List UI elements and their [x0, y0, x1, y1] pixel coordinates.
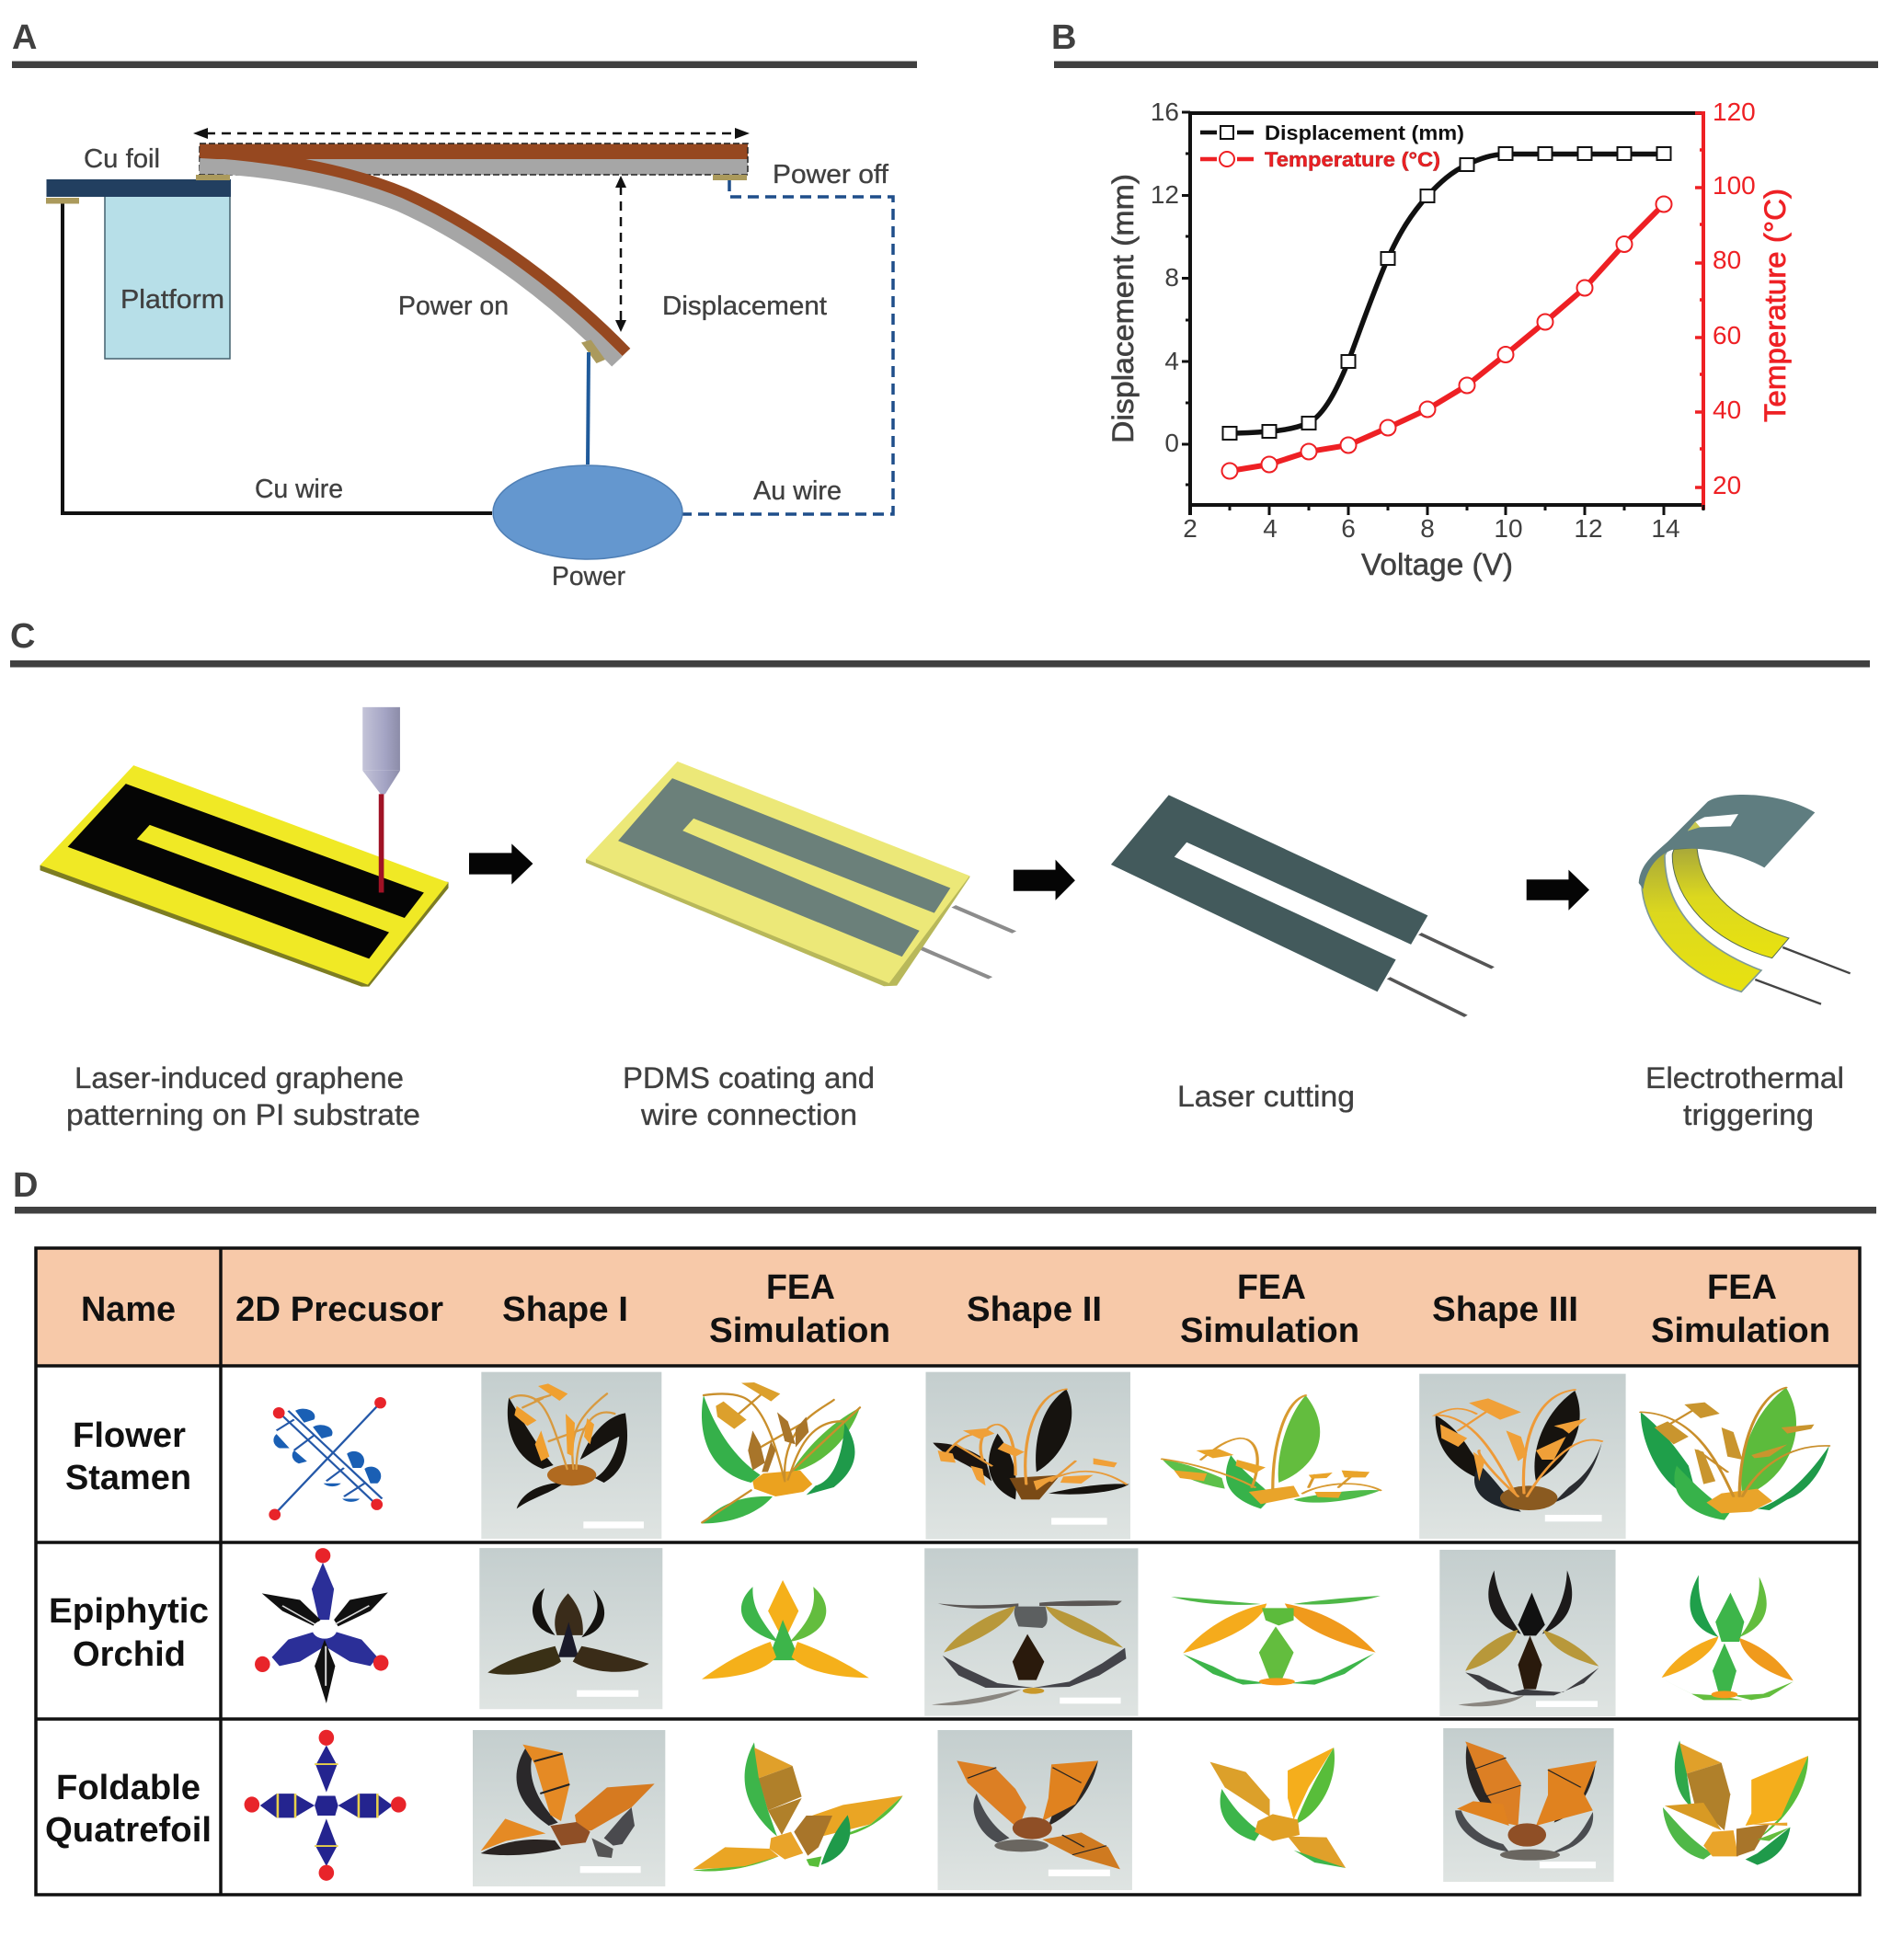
labels: Power on — [398, 292, 509, 321]
bottom axis numbers: 4 — [1263, 514, 1278, 543]
photo: orchid shape III — [1439, 1550, 1616, 1716]
bottom axis numbers: 12 — [1574, 514, 1603, 543]
legend — [1200, 121, 1464, 171]
labels: Power — [552, 562, 625, 591]
step 2 coated substrate — [586, 762, 1014, 986]
FEA: stamen III — [1641, 1388, 1829, 1520]
photo: quatrefoil shape II — [938, 1730, 1132, 1890]
column headers: Shape II — [967, 1290, 1102, 1329]
FEA: stamen I — [702, 1382, 860, 1523]
labels: Cu wire — [255, 475, 343, 504]
FEA: stamen II — [1162, 1395, 1381, 1508]
column headers: Shape I — [502, 1290, 628, 1329]
left axis numbers: 16 — [1151, 97, 1179, 126]
right axis numbers: 60 — [1713, 321, 1741, 350]
bottom axis numbers: 14 — [1651, 514, 1680, 543]
legend: Displacement (mm) — [1265, 121, 1464, 144]
right axis numbers: 80 — [1713, 246, 1741, 274]
right axis numbers: 20 — [1713, 471, 1741, 499]
photo: quatrefoil shape I — [473, 1730, 665, 1886]
column headers: FEA — [1707, 1268, 1777, 1307]
labels: Platform — [120, 285, 224, 315]
temperature curve — [1230, 204, 1664, 471]
column headers: FEA — [766, 1268, 835, 1307]
left axis numbers: 12 — [1151, 180, 1179, 209]
plot frame — [1190, 111, 1703, 515]
step 1 and 2 artwork — [40, 707, 1014, 987]
laser nozzle — [362, 707, 400, 892]
row labels: Stamen — [65, 1459, 191, 1497]
arrow 2 — [1014, 860, 1075, 900]
step captions: PDMS coating and — [623, 1061, 875, 1095]
column headers — [81, 1268, 1830, 1350]
precursor: flower stamen — [269, 1397, 386, 1520]
step 1 yellow substrate — [40, 765, 449, 987]
2D precursors and orchid shape I cells — [245, 1397, 869, 1881]
FEA: quatrefoil II — [1209, 1748, 1346, 1868]
axis titles — [1106, 174, 1792, 581]
column headers: Simulation — [1651, 1312, 1830, 1350]
displacement arrow — [615, 176, 626, 332]
Au wire dashed path — [682, 180, 893, 514]
labels: Au wire — [753, 476, 842, 506]
heading A: A — [12, 18, 37, 57]
step captions: Laser cutting — [1177, 1080, 1355, 1113]
step 3 artwork — [1014, 795, 1589, 1016]
length arrow — [193, 128, 750, 139]
contact pads — [46, 175, 747, 204]
straight beam power off — [200, 143, 748, 175]
column headers: 2D Precusor — [235, 1290, 443, 1329]
heading D: D — [13, 1166, 38, 1205]
left axis numbers: 4 — [1164, 347, 1179, 375]
row labels: Orchid — [73, 1635, 186, 1674]
step captions: Laser-induced graphene — [74, 1061, 404, 1095]
row labels: Epiphytic — [49, 1592, 209, 1631]
precursor: orchid — [255, 1548, 388, 1703]
blue wire to power — [588, 352, 589, 464]
step 4 bent actuator — [1639, 795, 1851, 1004]
row 2 shape II, III cells — [924, 1548, 1794, 1716]
row labels: Foldable — [56, 1769, 201, 1807]
Cu wire path — [63, 203, 492, 513]
row labels: Quatrefoil — [45, 1811, 212, 1850]
platform block — [105, 196, 230, 359]
row 3 shape I and FEA cells — [473, 1730, 903, 1886]
labels: Displacement — [662, 292, 827, 321]
bottom axis numbers: 6 — [1341, 514, 1356, 543]
right axis numbers: 40 — [1713, 395, 1741, 424]
panel A: actuator schematic — [12, 18, 917, 591]
table grid — [36, 1248, 1860, 1895]
power source ellipse — [493, 465, 682, 559]
row 1 shape II, III cells — [926, 1372, 1829, 1540]
bottom axis numbers: 8 — [1420, 514, 1435, 543]
column headers: Simulation — [709, 1312, 890, 1350]
left axis numbers: 8 — [1164, 263, 1179, 292]
left axis numbers — [1151, 97, 1179, 457]
photo: orchid shape II — [924, 1548, 1138, 1716]
FEA: orchid I — [702, 1580, 869, 1679]
step captions: patterning on PI substrate — [66, 1098, 420, 1131]
column headers: FEA — [1237, 1268, 1306, 1307]
step captions: Electrothermal — [1645, 1061, 1844, 1095]
FEA: orchid II — [1171, 1596, 1381, 1685]
legend: Temperature (°C) — [1265, 148, 1440, 171]
left and bottom ticks — [1182, 112, 1703, 515]
right ticks — [1695, 113, 1703, 487]
row 1 shape I and FEA cells — [481, 1372, 860, 1539]
step captions — [66, 1061, 1844, 1131]
bottom axis numbers — [1183, 514, 1680, 543]
photo: stamen shape I — [481, 1372, 661, 1539]
bent beam power on — [200, 152, 626, 363]
step captions: triggering — [1683, 1098, 1814, 1131]
FEA: quatrefoil III — [1663, 1740, 1808, 1865]
photo: stamen shape III — [1419, 1374, 1626, 1539]
displacement markers — [1223, 147, 1670, 440]
table header band — [36, 1248, 1860, 1366]
heading C: C — [10, 617, 35, 656]
right axis numbers: 100 — [1713, 171, 1756, 200]
photo: quatrefoil shape III — [1443, 1728, 1614, 1882]
step 3 cut actuator — [1111, 795, 1493, 1016]
precursor: quatrefoil — [245, 1730, 407, 1881]
right axis numbers: 120 — [1713, 97, 1756, 126]
row 3 shape II, III cells — [938, 1728, 1808, 1890]
labels: Cu foil — [84, 144, 160, 174]
bottom axis numbers: 2 — [1183, 514, 1198, 543]
step captions: wire connection — [640, 1098, 857, 1131]
axis titles: Temperature (°C) — [1759, 189, 1792, 422]
row labels — [45, 1416, 212, 1850]
left axis numbers: 0 — [1164, 429, 1179, 457]
panel C: fabrication process — [10, 617, 1870, 1131]
FEA: orchid III — [1662, 1575, 1794, 1700]
heading B: B — [1051, 18, 1076, 57]
axis titles: Voltage (V) — [1361, 547, 1513, 581]
Cu foil bar — [46, 179, 231, 197]
panel D: shapes table — [13, 1166, 1876, 1895]
column headers: Name — [81, 1290, 176, 1329]
arrow 3 — [1527, 870, 1589, 911]
column headers: Simulation — [1180, 1312, 1359, 1350]
bottom axis numbers: 10 — [1494, 514, 1523, 543]
photo: stamen shape II — [926, 1372, 1130, 1540]
temperature markers — [1221, 197, 1672, 478]
row labels: Flower — [73, 1416, 186, 1455]
photo: orchid shape I — [479, 1548, 662, 1709]
labels — [84, 144, 889, 591]
FEA: quatrefoil I — [693, 1742, 903, 1871]
displacement curve — [1230, 155, 1664, 433]
right axis numbers — [1713, 97, 1756, 499]
column headers: Shape III — [1432, 1290, 1578, 1329]
labels: Power off — [773, 160, 889, 189]
axis titles: Displacement (mm) — [1106, 174, 1140, 443]
arrow 1 — [469, 843, 533, 885]
panel B: voltage chart — [1051, 18, 1878, 581]
